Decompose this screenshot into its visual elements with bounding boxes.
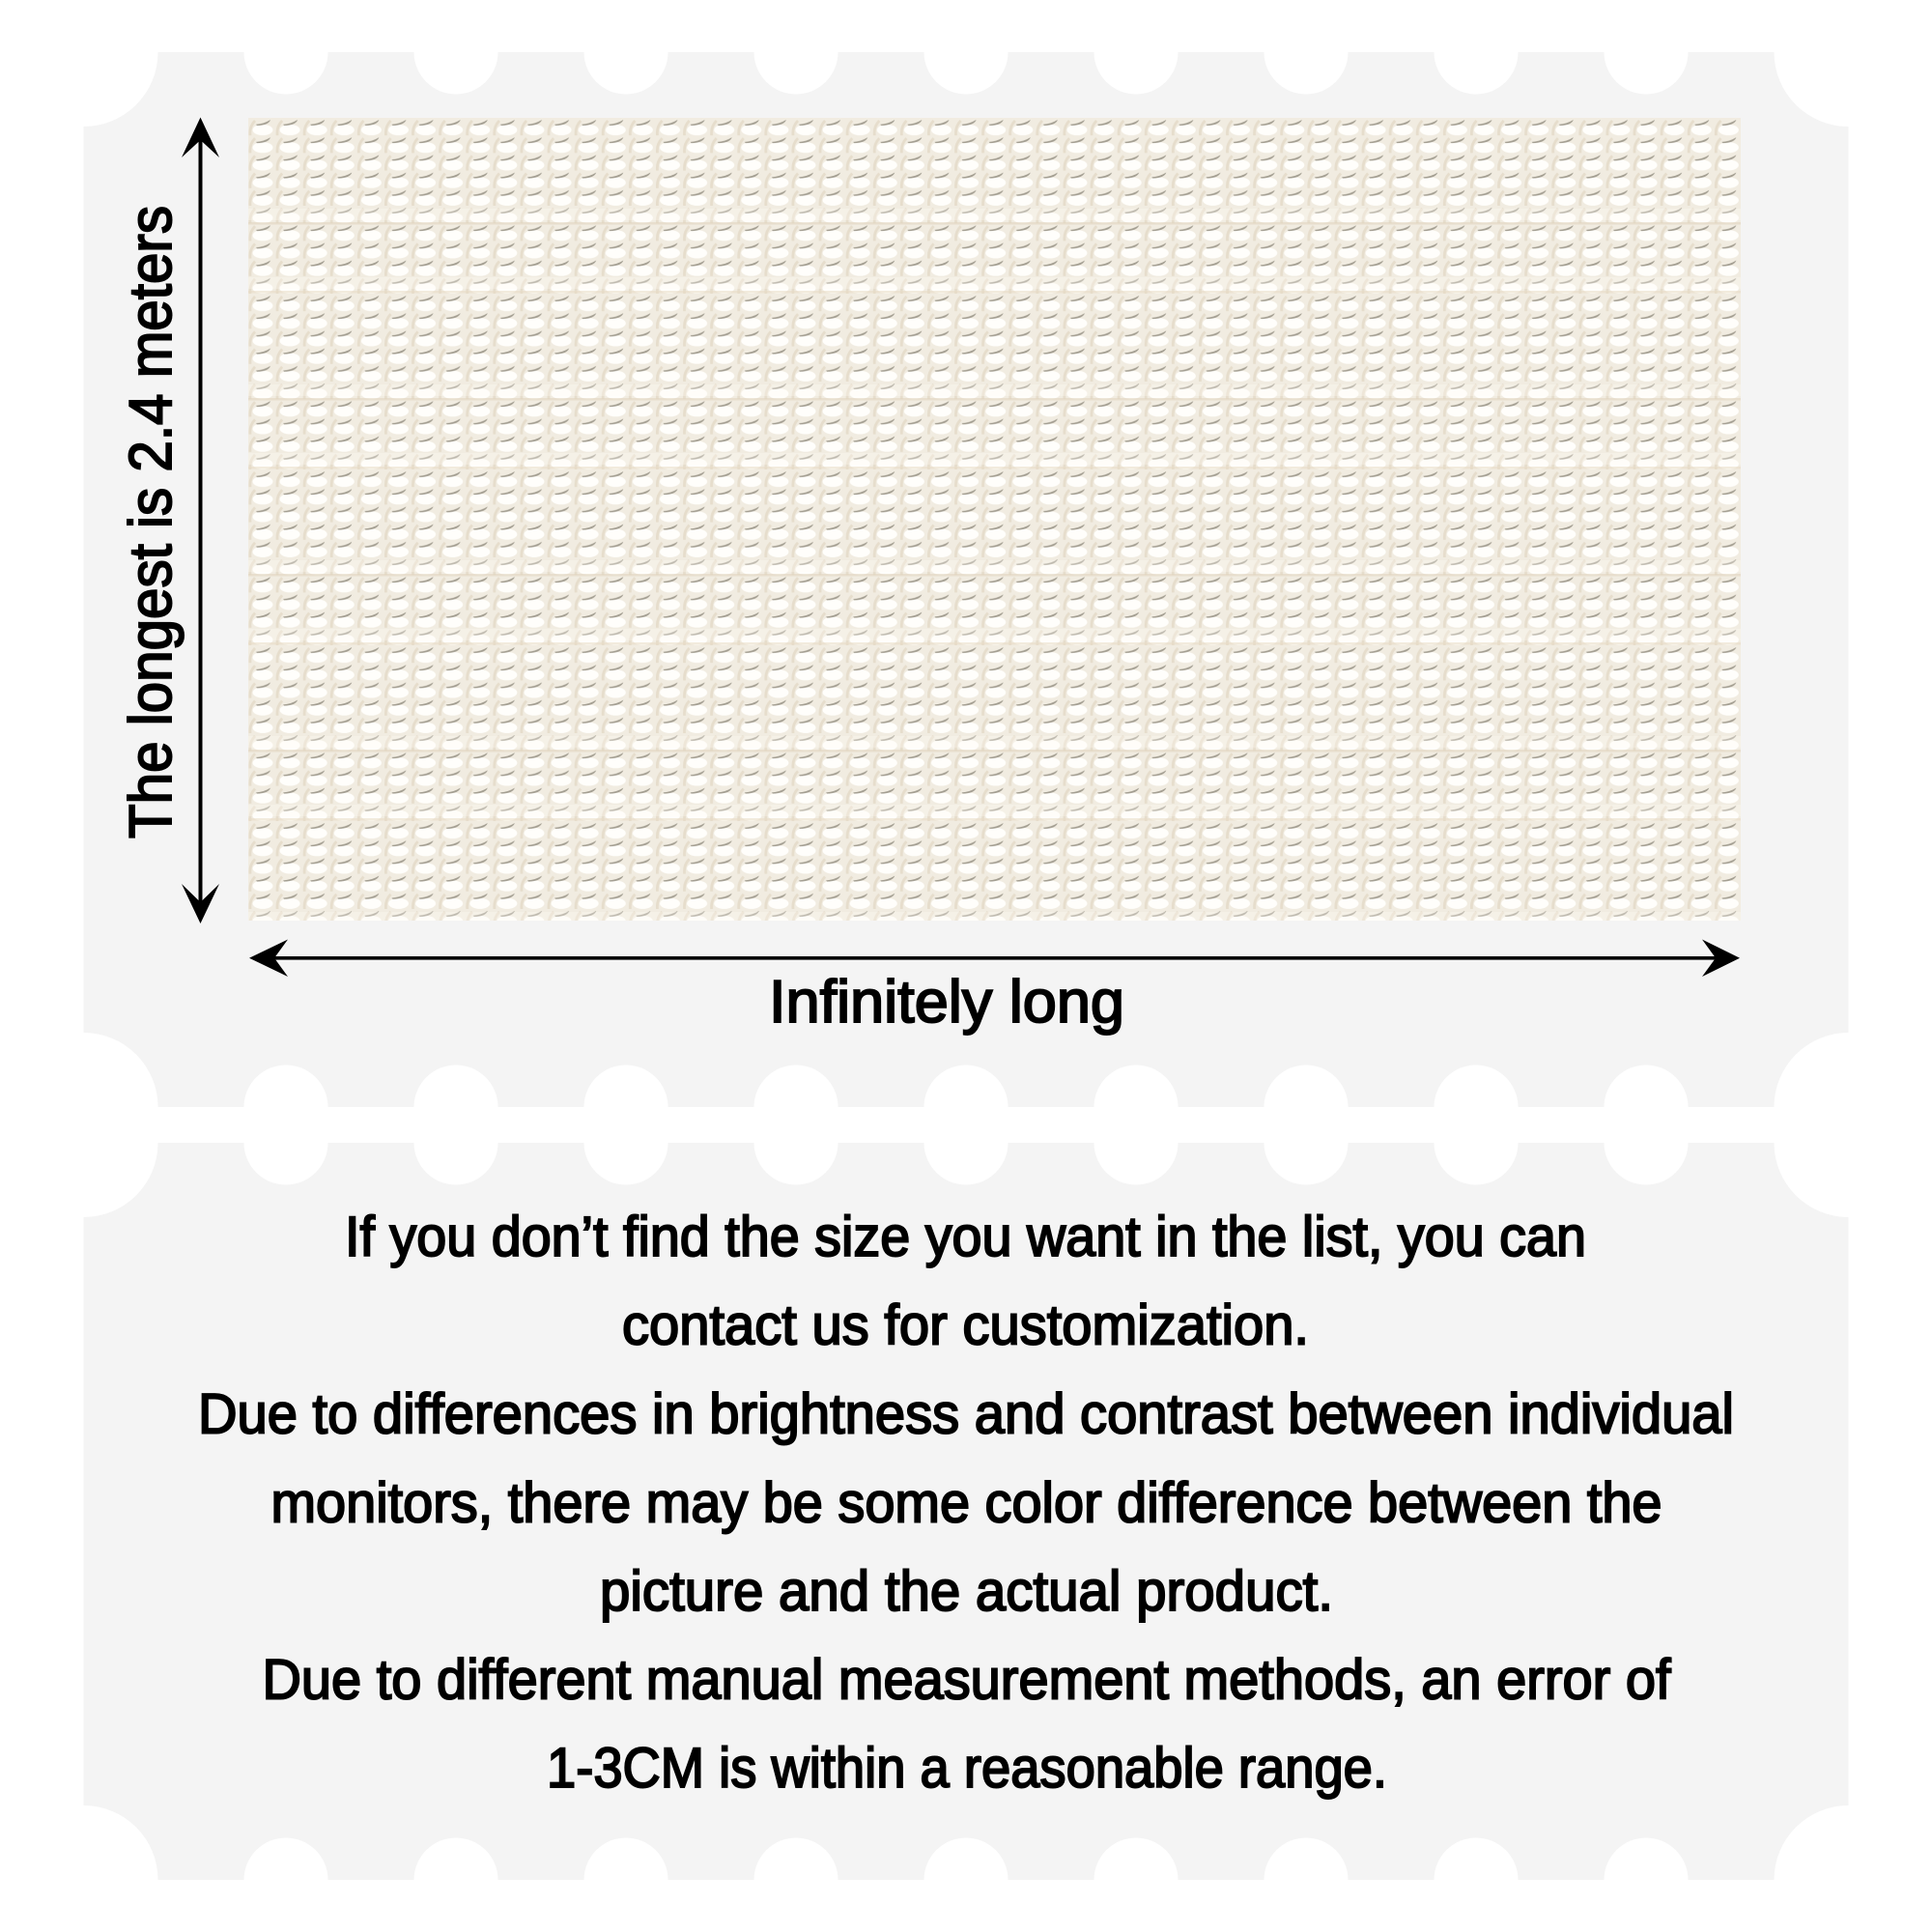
text block: customization and disclaimer notes [198,1206,1734,1800]
text block: customization and disclaimer notes: contact us for customization. [622,1294,1309,1356]
panel: customization notes [10,1068,1922,1932]
label: infinitely long: Infinitely long [769,969,1124,1036]
panel: product size [10,0,1922,1181]
text block: customization and disclaimer notes: picture and the actual product. [600,1560,1333,1623]
text block: customization and disclaimer notes: 1-3CM is within a reasonable range. [547,1737,1387,1800]
text block: customization and disclaimer notes: If you don’t find the size you want in the list, you can [345,1206,1586,1268]
label: the longest is 2.4 meters: The longest is 2.4 meters [118,206,185,838]
arrow: horizontal dimension [249,939,1740,977]
fabric texture swatch [248,118,1741,921]
text block: customization and disclaimer notes: Due to differences in brightness and contrast between individual [198,1383,1734,1445]
arrow: vertical dimension [182,118,219,923]
text block: customization and disclaimer notes: Due to different manual measurement methods, an error of [263,1648,1671,1712]
text block: customization and disclaimer notes: monitors, there may be some color difference between the [270,1472,1662,1534]
